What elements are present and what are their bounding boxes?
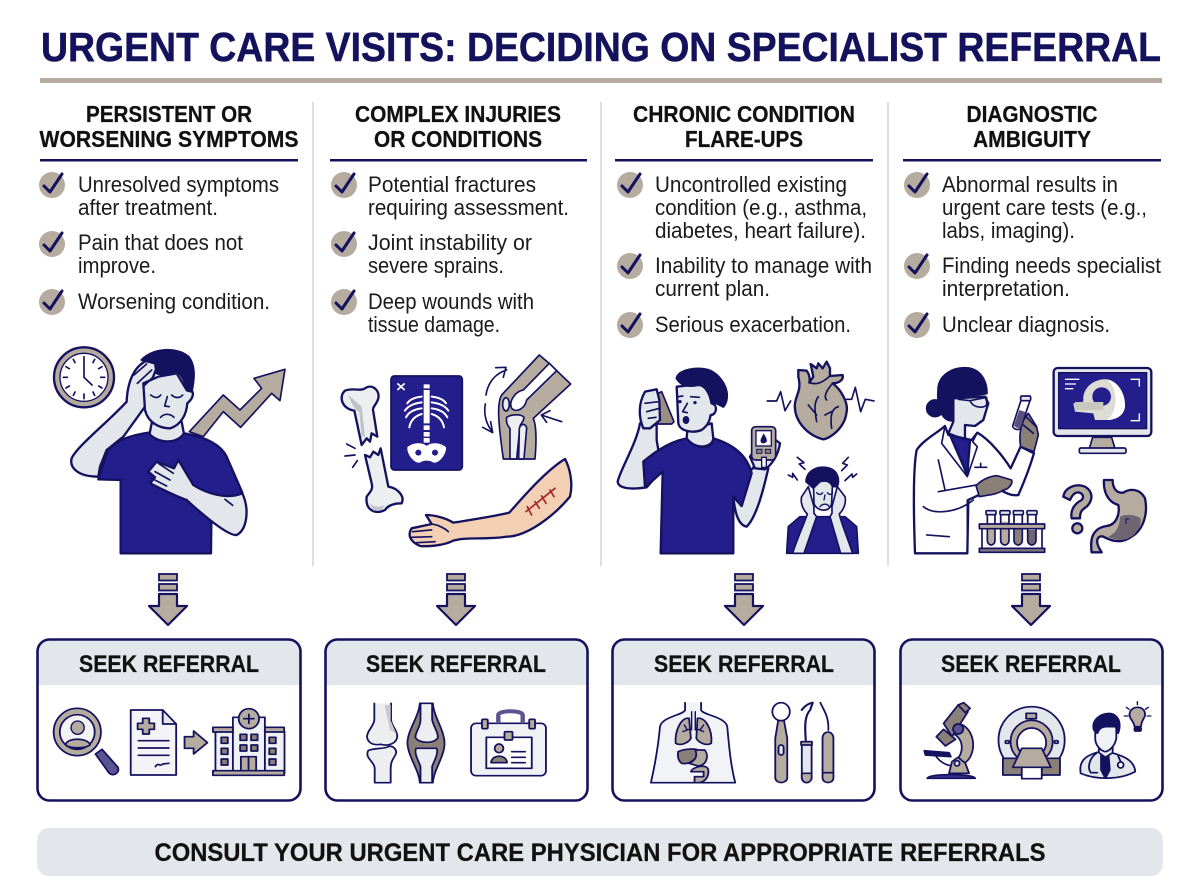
heading: chronic condition flare-ups	[615, 101, 873, 162]
illustration: man with headache, clock and rising arrow	[54, 347, 285, 553]
arrow: column 2 to referral	[437, 574, 475, 625]
checklist: persistent symptoms: Unresolved symptoms	[78, 172, 279, 197]
heading: persistent or worsening symptoms: WORSENING SYMPTOMS	[40, 126, 298, 152]
panel: complex injuries or conditions	[330, 101, 587, 546]
panel: persistent or worsening symptoms	[39, 101, 298, 553]
footer call to action: CONSULT YOUR URGENT CARE PHYSICIAN FOR APPROPRIATE REFERRALS	[154, 839, 1046, 867]
heading: diagnostic ambiguity	[903, 101, 1161, 162]
heading: complex injuries or conditions: OR CONDITIONS	[374, 126, 542, 152]
heading: diagnostic ambiguity: DIAGNOSTIC	[966, 101, 1098, 127]
illustration: man with inhaler and glucose meter, heart, headache	[618, 362, 874, 553]
referral box 1	[38, 640, 300, 800]
checklist: persistent symptoms: Pain that does not	[78, 230, 243, 255]
checklist: complex injuries: requiring assessment.	[368, 195, 569, 220]
arrow: column 3 to referral	[725, 574, 763, 625]
referral box 2	[326, 640, 588, 800]
heading: complex injuries or conditions: COMPLEX INJURIES	[355, 101, 561, 127]
checklist: chronic condition: Uncontrolled existing	[655, 172, 847, 197]
illustration: fracture, x-ray, knee and stitched arm	[342, 355, 571, 546]
illustration: lab scientist, test tubes, monitor scan, stomach	[914, 368, 1151, 553]
icons: knee joints, medical kit	[367, 703, 546, 783]
checklist: diagnostic ambiguity: interpretation.	[942, 276, 1070, 301]
checklist: diagnostic ambiguity: Finding needs specialist	[942, 253, 1161, 278]
arrow: column 4 to referral	[1012, 574, 1050, 625]
checklist: chronic condition: Serious exacerbation.	[655, 312, 851, 337]
checklist: complex injuries: Joint instability or	[368, 230, 532, 255]
icons: microscope, MRI scanner, doctor with idea	[924, 702, 1151, 779]
checklist: complex injuries: severe sprains.	[368, 253, 504, 278]
heading: diagnostic ambiguity: AMBIGUITY	[973, 126, 1091, 152]
panel: chronic condition flare-ups	[615, 101, 874, 553]
checklist: chronic condition: current plan.	[655, 276, 770, 301]
checklist: diagnostic ambiguity: urgent care tests (e.g.,	[942, 195, 1147, 220]
checklist: diagnostic ambiguity: labs, imaging).	[942, 218, 1075, 243]
panel: diagnostic ambiguity	[903, 101, 1161, 553]
checklist: complex injuries: tissue damage.	[368, 312, 500, 337]
heading: complex injuries or conditions	[330, 101, 587, 162]
arrow: column 1 to referral	[149, 574, 187, 625]
referral box 2: SEEK REFERRAL	[366, 651, 546, 678]
checklist: persistent symptoms: improve.	[78, 253, 156, 278]
icons: torso organs, dental tools	[651, 703, 833, 783]
checklist: complex injuries: Potential fractures	[368, 172, 536, 197]
checklist: complex injuries	[331, 172, 569, 337]
referral box 4: SEEK REFERRAL	[941, 651, 1121, 678]
checklist: diagnostic ambiguity	[904, 172, 1161, 338]
checklist: chronic condition	[617, 172, 872, 338]
referral box 4	[900, 640, 1162, 800]
referral box 1: SEEK REFERRAL	[79, 651, 259, 678]
checklist: persistent symptoms: Worsening condition.	[78, 289, 270, 314]
checklist: persistent symptoms	[39, 172, 279, 315]
footer call to action	[37, 828, 1163, 876]
referral box 3: SEEK REFERRAL	[654, 651, 834, 678]
checklist: persistent symptoms: after treatment.	[78, 195, 218, 220]
checklist: diagnostic ambiguity: Abnormal results in	[942, 172, 1118, 197]
checklist: complex injuries: Deep wounds with	[368, 289, 534, 314]
heading: persistent or worsening symptoms: PERSISTENT OR	[86, 101, 252, 127]
heading: persistent or worsening symptoms	[40, 101, 298, 162]
checklist: chronic condition: diabetes, heart failure).	[655, 218, 866, 243]
referral box 3	[612, 640, 874, 800]
icons: search, referral document, hospital	[54, 708, 285, 775]
checklist: chronic condition: condition (e.g., asthma,	[655, 195, 867, 220]
heading: chronic condition flare-ups: CHRONIC CONDITION	[633, 101, 855, 127]
checklist: chronic condition: Inability to manage with	[655, 253, 872, 278]
heading: chronic condition flare-ups: FLARE-UPS	[685, 126, 803, 152]
checklist: diagnostic ambiguity: Unclear diagnosis.	[942, 312, 1110, 337]
